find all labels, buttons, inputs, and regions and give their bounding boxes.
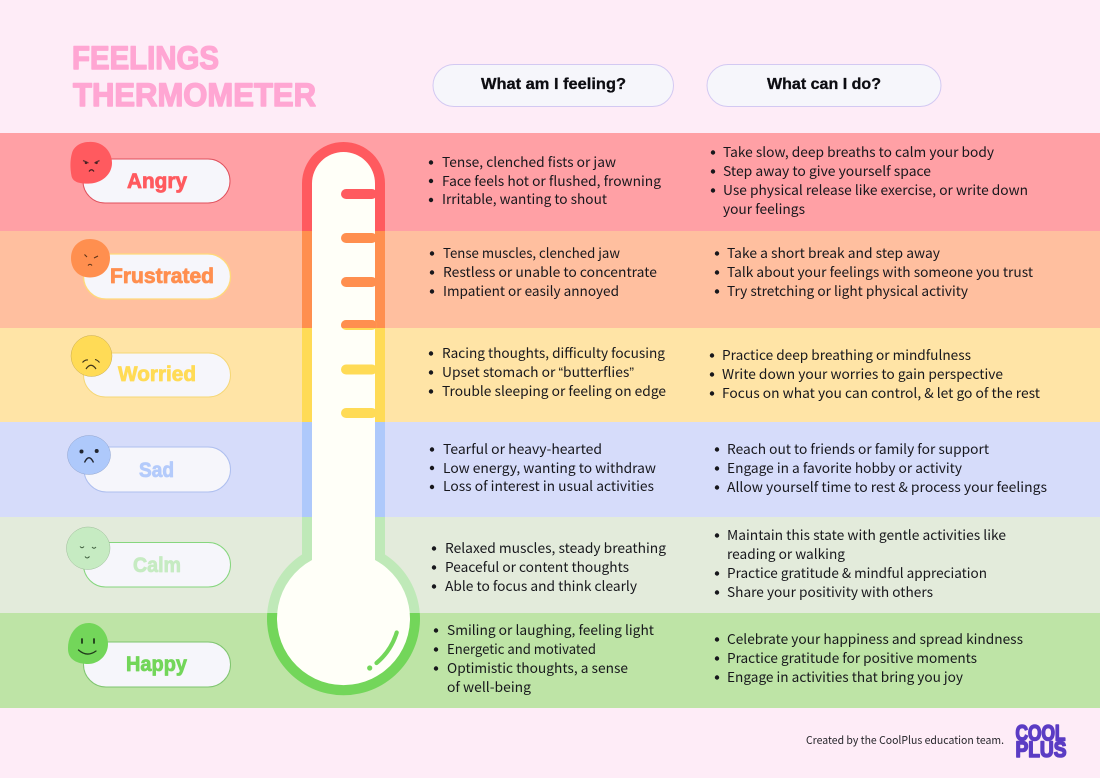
label pill: calm: Calm (133, 554, 181, 577)
text: angry actions: your feelings (723, 198, 805, 218)
label pill: angry (83, 159, 230, 203)
text: angry feelings: Face feels hot or flushed, frowning (442, 170, 661, 190)
text: frustrated actions (715, 242, 1033, 300)
panel: angry (0, 133, 1100, 231)
text: worried actions (710, 344, 1040, 402)
text: happy feelings: Smiling or laughing, feeling light (447, 619, 654, 639)
label pill: happy: Happy (126, 653, 187, 676)
text: worried feelings: Upset stomach or “butterflies” (442, 361, 634, 381)
text: worried actions: Write down your worries to gain perspective (722, 363, 1003, 383)
text: calm actions: reading or walking (727, 543, 845, 563)
text: angry actions: Step away to give yourself space (723, 160, 931, 180)
text: angry actions: Take slow, deep breaths to calm your body (723, 141, 994, 161)
text: calm feelings: Relaxed muscles, steady breathing (445, 537, 666, 557)
text: sad feelings (430, 438, 656, 495)
text: frustrated feelings: Tense muscles, clenched jaw (443, 242, 620, 262)
title (72, 40, 316, 113)
label pill: worried: Worried (118, 363, 196, 386)
text: frustrated feelings: Restless or unable to concentrate (443, 261, 657, 281)
column heading: what can I do (707, 64, 941, 106)
label pill: sad: Sad (139, 459, 174, 482)
label pill: worried (84, 353, 230, 397)
label pill: sad (84, 447, 230, 492)
label pill: calm (84, 542, 230, 587)
text: happy feelings: Energetic and motivated (447, 638, 596, 658)
text: sad actions: Allow yourself time to rest & process your feelings (727, 476, 1047, 496)
icon: sad face (68, 436, 110, 474)
text: frustrated actions: Talk about your feelings with someone you trust (727, 261, 1033, 281)
text: angry feelings (429, 151, 661, 208)
text: happy actions: Engage in activities that bring you joy (727, 666, 963, 686)
text: calm feelings: Able to focus and think clearly (445, 575, 637, 595)
text: calm feelings (432, 537, 666, 595)
panel: sad (0, 422, 1100, 517)
text: frustrated feelings (430, 242, 657, 300)
panel: happy (0, 613, 1100, 708)
icon: worried face (71, 336, 112, 376)
label pill: frustrated (84, 254, 230, 299)
label pill: happy (84, 642, 230, 687)
text: happy actions: Celebrate your happiness and spread kindness (727, 628, 1023, 648)
text: worried actions: Practice deep breathing or mindfulness (722, 344, 971, 364)
text: sad feelings: Low energy, wanting to withdraw (443, 457, 656, 477)
text: calm actions: Maintain this state with gentle activities like (727, 524, 1006, 544)
text: calm feelings: Peaceful or content thoughts (445, 556, 629, 576)
text: worried actions: Focus on what you can control, & let go of the rest (722, 382, 1040, 402)
thermometer (267, 142, 420, 695)
icon: angry face (70, 142, 112, 184)
title: THERMOMETER (73, 77, 316, 113)
text: calm actions (715, 524, 1006, 601)
text: angry feelings: Tense, clenched fists or jaw (442, 151, 616, 171)
panel: calm (0, 517, 1100, 613)
text: frustrated actions: Take a short break and step away (727, 242, 940, 262)
text: happy feelings: of well-being (447, 676, 531, 696)
footer credit: Created by the CoolPlus education team. (806, 732, 1004, 748)
text: happy actions (715, 628, 1023, 686)
text: angry actions (711, 141, 1028, 218)
icon: calm face (66, 527, 110, 570)
text: happy feelings: Optimistic thoughts, a sense (447, 657, 628, 677)
text: happy feelings (434, 619, 654, 696)
text: calm actions: Practice gratitude & mindful appreciation (727, 562, 987, 582)
text: angry feelings: Irritable, wanting to shout (442, 188, 607, 208)
text: sad feelings: Loss of interest in usual activities (443, 475, 654, 495)
logo: CoolPlus: COOL (1016, 720, 1066, 746)
title: FEELINGS (72, 40, 219, 76)
label pill: angry: Angry (127, 170, 187, 193)
panel: worried (0, 328, 1100, 422)
text: sad actions: Engage in a favorite hobby or activity (727, 457, 962, 477)
column heading: what can I do: What can I do? (767, 76, 881, 93)
text: sad actions (715, 438, 1047, 496)
text: calm actions: Share your positivity with others (727, 581, 933, 601)
column heading: what am I feeling (433, 64, 674, 106)
logo: CoolPlus (1016, 720, 1066, 762)
column heading: what am I feeling: What am I feeling? (481, 76, 626, 93)
text: worried feelings: Trouble sleeping or feeling on edge (442, 380, 666, 400)
text: worried feelings (429, 342, 666, 400)
text: sad actions: Reach out to friends or family for support (727, 438, 989, 458)
text: worried feelings: Racing thoughts, difficulty focusing (442, 342, 665, 362)
icon: frustrated face (71, 239, 110, 278)
label pill: frustrated: Frustrated (110, 265, 214, 288)
icon: happy face (68, 623, 108, 664)
logo: CoolPlus: PLUS (1016, 737, 1066, 762)
text: frustrated actions: Try stretching or light physical activity (727, 280, 968, 300)
text: frustrated feelings: Impatient or easily annoyed (443, 280, 619, 300)
panel: frustrated (0, 231, 1100, 328)
text: angry actions: Use physical release like exercise, or write down (723, 179, 1028, 199)
text: sad feelings: Tearful or heavy-hearted (443, 438, 602, 458)
text: happy actions: Practice gratitude for positive moments (727, 647, 977, 667)
